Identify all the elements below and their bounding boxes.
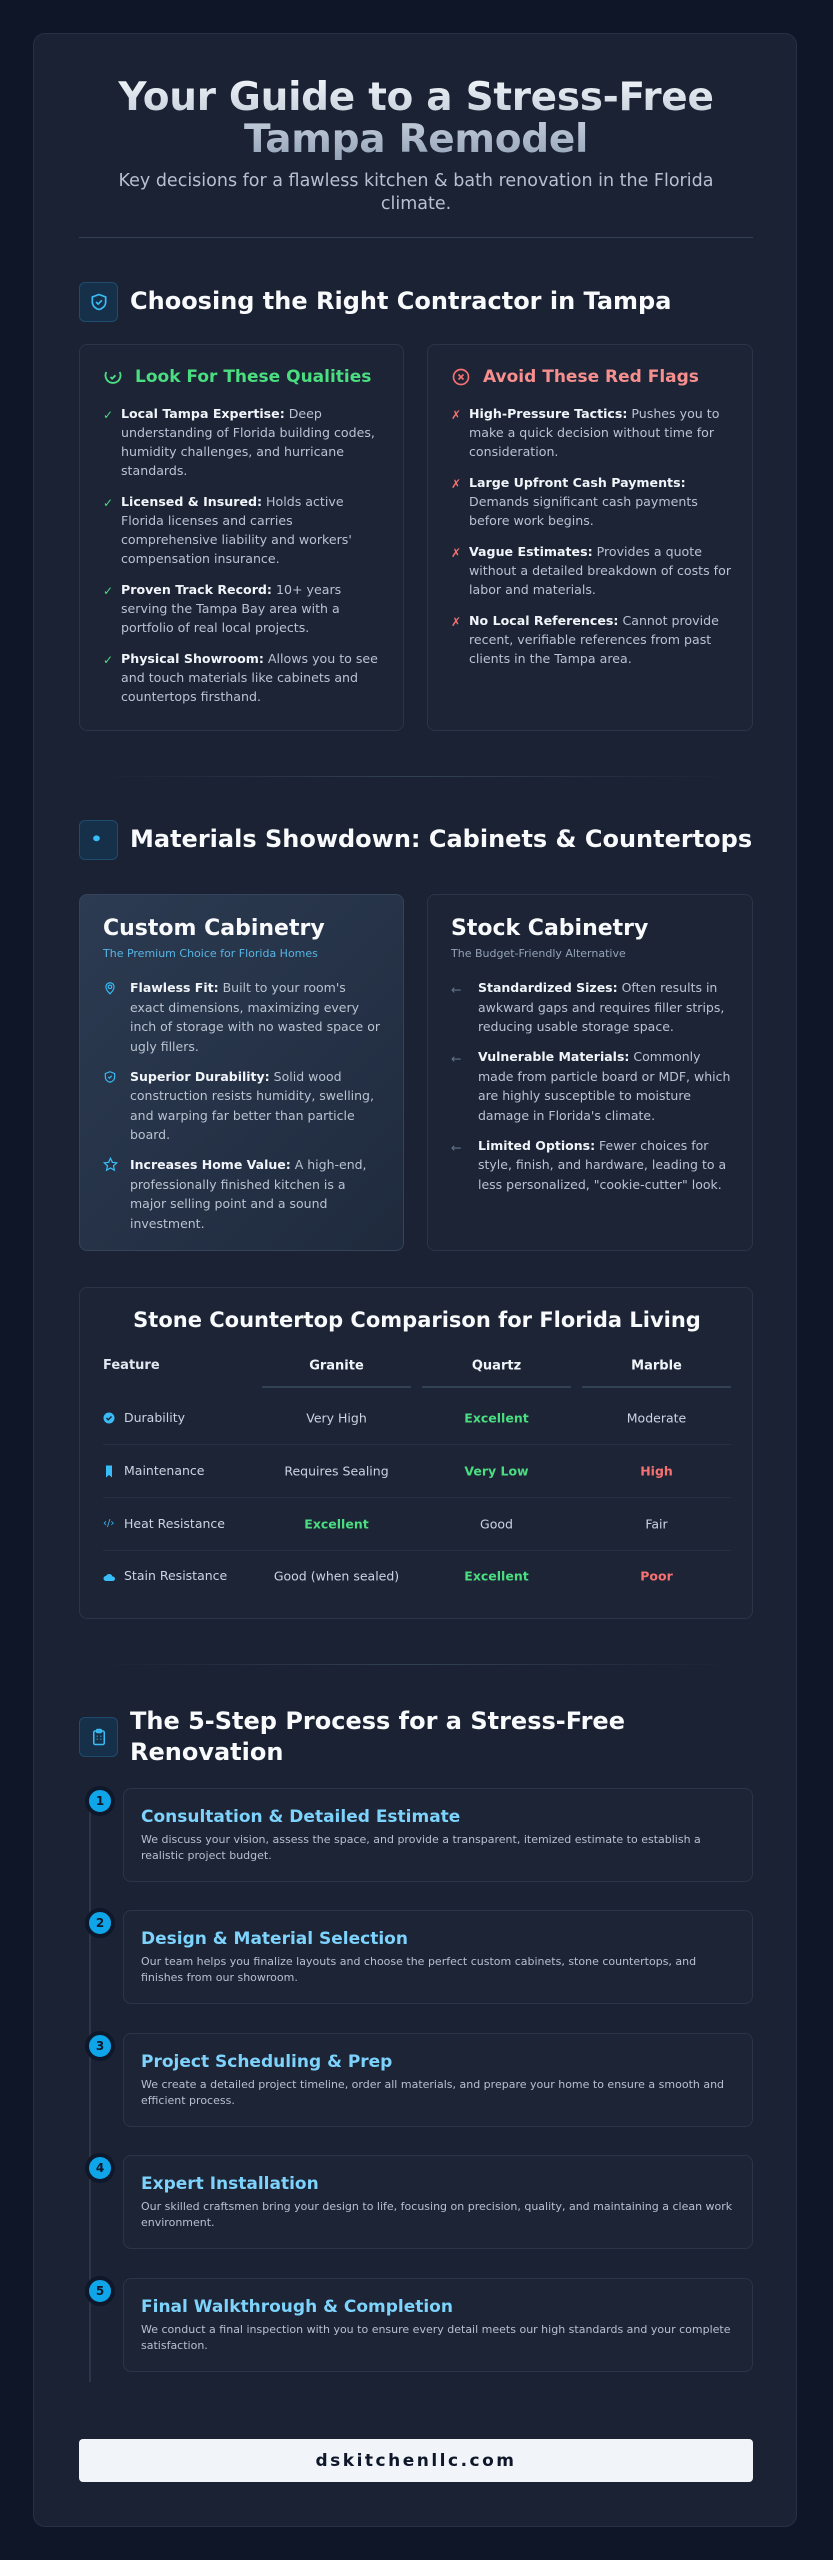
table title: Stone Countertop Comparison for Florida Living	[133, 1308, 701, 1332]
panel: countertop table: Good (when sealed)	[274, 1568, 399, 1584]
panel: red flags	[427, 344, 753, 731]
panel: stock cabinetry: ←	[451, 1051, 461, 1066]
panel: countertop table: Poor	[640, 1568, 673, 1584]
row: durability: Durability	[124, 1410, 185, 1425]
number 3: 3	[96, 2039, 104, 2053]
heading: stock: Stock Cabinetry	[451, 916, 648, 941]
panel: countertop table: Quartz	[472, 1358, 521, 1374]
step 5	[123, 2278, 753, 2372]
title: Your Guide to a Stress-Free	[118, 75, 714, 120]
heading: custom: Custom Cabinetry	[103, 916, 325, 941]
panel: qualities: Proven Track Record: 10+ years serving the Tampa Bay area with a portfolio of real local projects.	[121, 582, 341, 635]
panel: stock cabinetry: ←	[451, 1140, 461, 1154]
number 5: 5	[96, 2284, 104, 2298]
number 4	[85, 2153, 115, 2183]
subtitle: climate.	[381, 194, 451, 214]
timeline line	[89, 1801, 91, 2382]
icon: materials	[79, 820, 118, 860]
footer url: dskitchenllc.com	[315, 2450, 517, 2470]
panel: countertop table: Excellent	[464, 1410, 529, 1426]
row: heat: Heat Resistance	[124, 1516, 225, 1531]
icon: shield	[79, 282, 118, 322]
number 1: 1	[96, 1794, 104, 1808]
panel: stock cabinetry: Limited Options: Fewer choices for style, finish, and hardware, leading to a less personalized, "cookie-cutter" look.	[478, 1138, 726, 1192]
step 5: We conduct a final inspection with you to ensure every detail meets our high standards and your complete satisfaction.	[141, 2323, 730, 2352]
panel: red flags: High-Pressure Tactics: Pushes you to make a quick decision without time for consideration.	[469, 406, 719, 459]
title	[79, 77, 753, 161]
step 4: Expert Installation	[141, 2174, 319, 2194]
panel: countertop table: Very High	[306, 1410, 367, 1426]
panel: stock cabinetry: Vulnerable Materials: Commonly made from particle board or MDF, which are highly susceptible to moisture damage in Florida's climate.	[478, 1049, 730, 1122]
panel: custom cabinetry: Increases Home Value: A high-end, professionally finished kitchen is a major selling point and a sound investment.	[130, 1157, 367, 1230]
panel: countertop table: Moderate	[627, 1410, 686, 1426]
step 3	[123, 2033, 753, 2127]
panel: countertop table: Marble	[631, 1358, 682, 1374]
step 4: Our skilled craftsmen bring your design to life, focusing on precision, quality, and maintaining a clean work environment.	[141, 2200, 732, 2229]
number 5	[85, 2276, 115, 2306]
panel: countertop table: Good	[480, 1516, 513, 1532]
footer url	[79, 2439, 753, 2482]
panel: countertop table: High	[640, 1464, 673, 1478]
panel: red flags: No Local References: Cannot provide recent, verifiable references from past clients in the Tampa area.	[469, 613, 719, 666]
panel: countertop table: Excellent	[304, 1516, 369, 1532]
number 4: 4	[96, 2161, 104, 2175]
panel: qualities: Physical Showroom: Allows you to see and touch materials like cabinets and countertops firsthand.	[121, 651, 378, 704]
step 1: We discuss your vision, assess the space, and provide a transparent, itemized estimate to establish a realistic project budget.	[141, 1833, 701, 1862]
panel: stock cabinetry	[427, 894, 753, 1251]
panel: custom cabinetry	[79, 894, 404, 1251]
title: Tampa Remodel	[244, 117, 588, 162]
step 1: Consultation & Detailed Estimate	[141, 1807, 460, 1827]
panel: stock cabinetry: Standardized Sizes: Often results in awkward gaps and requires filler strips, reducing usable storage space.	[478, 980, 724, 1034]
panel: countertop table: Excellent	[464, 1568, 529, 1584]
step 3: We create a detailed project timeline, order all materials, and prepare your home to ensure a smooth and efficient process.	[141, 2078, 724, 2107]
number 1	[85, 1786, 115, 1816]
number 2	[85, 1908, 115, 1938]
panel: stock cabinetry: ←	[451, 982, 461, 997]
row: stain: Stain Resistance	[124, 1568, 227, 1583]
step 4	[123, 2155, 753, 2249]
section heading: contractor: Choosing the Right Contractor in Tampa	[130, 287, 671, 315]
heading: red flags: Avoid These Red Flags	[483, 367, 699, 387]
row: heat: ‹/›	[103, 1518, 114, 1529]
panel: red flags: ✗	[451, 615, 461, 629]
step 2	[123, 1910, 753, 2004]
panel: red flags: ✗	[451, 546, 461, 560]
panel: qualities: Local Tampa Expertise: Deep understanding of Florida building codes, humidity challenges, and hurricane standards.	[121, 406, 375, 478]
panel: custom cabinetry: Superior Durability: Solid wood construction resists humidity, swelling, and warping far better than particle board.	[130, 1068, 374, 1142]
panel: qualities: ✓	[103, 408, 113, 422]
panel: qualities	[79, 344, 404, 731]
heading: qualities: Look For These Qualities	[135, 367, 371, 387]
subtitle: Key decisions for a flawless kitchen & bath renovation in the Florida	[119, 171, 713, 191]
panel: countertop table: Requires Sealing	[284, 1464, 389, 1478]
panel: custom cabinetry: The Premium Choice for Florida Homes	[103, 947, 318, 960]
section heading: materials: Materials Showdown: Cabinets & Countertops	[130, 825, 752, 853]
panel: stock cabinetry: The Budget-Friendly Alternative	[451, 947, 626, 960]
panel: red flags: ✗	[451, 477, 461, 491]
step 3: Project Scheduling & Prep	[141, 2052, 392, 2072]
panel: qualities: Licensed & Insured: Holds active Florida licenses and carries comprehensive liability and workers' compensation insurance.	[121, 494, 352, 566]
panel: custom cabinetry: Flawless Fit: Built to your room's exact dimensions, maximizing every inch of storage with no wasted space or ugly fillers.	[130, 980, 380, 1054]
panel: red flags: Large Upfront Cash Payments: Demands significant cash payments before work begins.	[469, 475, 698, 528]
section heading: process: Renovation	[130, 1738, 283, 1766]
subtitle	[119, 171, 713, 214]
step 2: Design & Material Selection	[141, 1929, 408, 1949]
panel: qualities: ✓	[103, 653, 113, 667]
step 1	[123, 1788, 753, 1882]
number 2: 2	[96, 1916, 104, 1930]
row: maintenance: Maintenance	[124, 1463, 204, 1478]
icon: clipboard	[79, 1717, 118, 1757]
panel: countertop table	[79, 1287, 753, 1619]
panel: countertop table: Granite	[309, 1358, 364, 1374]
panel: qualities: ✓	[103, 496, 113, 510]
panel: red flags: ✗	[451, 408, 461, 422]
number 3	[85, 2031, 115, 2061]
step 5: Final Walkthrough & Completion	[141, 2297, 453, 2317]
section heading: process: The 5-Step Process for a Stress-Free	[130, 1707, 625, 1735]
panel: countertop table: Fair	[645, 1516, 668, 1532]
table header: Feature	[103, 1358, 160, 1373]
panel: qualities: ✓	[103, 584, 113, 598]
panel: countertop table: Very Low	[464, 1464, 529, 1478]
step 2: Our team helps you finalize layouts and choose the perfect custom cabinets, stone countertops, and finishes from our showroom.	[141, 1955, 696, 1984]
section heading: process	[130, 1707, 625, 1766]
panel: red flags: Vague Estimates: Provides a quote without a detailed breakdown of costs for labor and materials.	[469, 544, 731, 597]
